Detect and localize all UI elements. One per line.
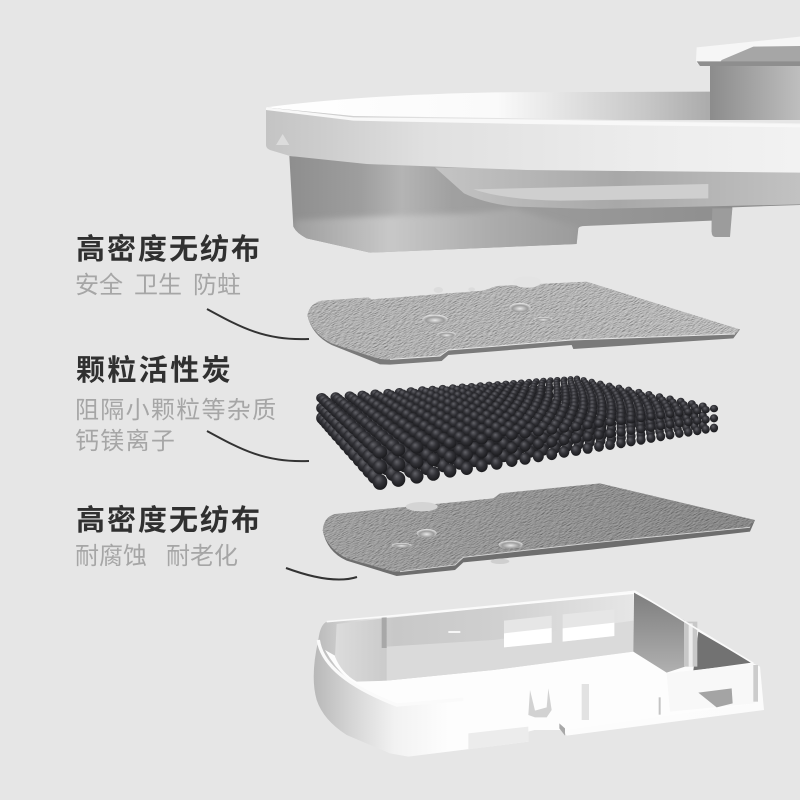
- label: activated carbon layer: [75, 354, 277, 455]
- small clip mark: [448, 631, 460, 633]
- post highlight: [689, 623, 693, 667]
- top cap: [696, 37, 800, 65]
- snap clip: [528, 688, 552, 717]
- description: 卫生: [134, 272, 182, 299]
- rim front: [266, 107, 800, 173]
- front edge highlight: [390, 334, 735, 359]
- dish light band: [473, 184, 708, 201]
- filter layer: activated carbon granules: [316, 361, 718, 490]
- description: 耐老化: [166, 543, 238, 570]
- heading: 高密度无纺布: [76, 504, 262, 537]
- sheet surface: [308, 282, 740, 360]
- cap underside line: [697, 61, 800, 66]
- front rib: [582, 684, 589, 720]
- window right lower opening: [563, 623, 614, 642]
- heading: 高密度无纺布: [76, 233, 262, 266]
- back wall rib: [382, 617, 387, 648]
- tray outer body: [314, 591, 764, 757]
- housing box underside: [289, 156, 800, 253]
- water drops: [422, 276, 553, 338]
- tray inner surface: [266, 92, 710, 120]
- top edge highlight: [327, 591, 753, 663]
- tray inner floor: [325, 650, 755, 737]
- description: [75, 543, 238, 570]
- description: [75, 397, 277, 455]
- filter sheet 2: non-woven: [322, 484, 755, 576]
- locating post: [712, 208, 732, 237]
- right wall far section: [693, 632, 752, 671]
- center notch: [559, 723, 565, 736]
- rim notch: [276, 134, 289, 145]
- label: first non-woven layer: [75, 233, 262, 299]
- sheet surface: [322, 484, 755, 572]
- front slot: [698, 688, 733, 707]
- sheet side edge: [307, 315, 740, 365]
- dish underside: [435, 167, 800, 209]
- base lip: [468, 727, 528, 749]
- leader line 2: [207, 431, 309, 461]
- description: 安全: [75, 272, 123, 299]
- right wall: [633, 593, 685, 673]
- right end column: [753, 665, 758, 702]
- window right: [563, 609, 614, 642]
- product: upper filter housing: [266, 37, 800, 260]
- curved rim highlight: [318, 640, 463, 705]
- window left: [504, 616, 552, 647]
- description: 钙镁离子: [75, 428, 176, 455]
- small rib: [659, 697, 661, 715]
- leader line 1: [207, 309, 309, 339]
- product: lower filter tray: [314, 591, 764, 757]
- description: [75, 272, 241, 299]
- heading: 颗粒活性炭: [76, 354, 233, 387]
- description: 防蛀: [193, 272, 241, 299]
- central column: [710, 63, 800, 120]
- sheet side edge: [323, 520, 755, 576]
- rim highlight: [266, 107, 800, 127]
- water drops: [392, 502, 523, 564]
- right end wall: [667, 663, 755, 712]
- filter sheet 1: non-woven: [307, 282, 740, 365]
- leader line 3: [286, 568, 357, 580]
- description: 阻隔小颗粒等杂质: [75, 397, 277, 424]
- corner post: [684, 622, 697, 667]
- front edge highlight: [400, 527, 750, 572]
- back wall lower reflection: [387, 621, 633, 681]
- description: 耐腐蚀: [75, 543, 147, 570]
- back wall: [335, 594, 633, 682]
- window left lower opening: [504, 628, 552, 647]
- housing lower band: [294, 210, 574, 252]
- label: second non-woven layer: [75, 504, 262, 570]
- cap inner recess: [718, 46, 800, 65]
